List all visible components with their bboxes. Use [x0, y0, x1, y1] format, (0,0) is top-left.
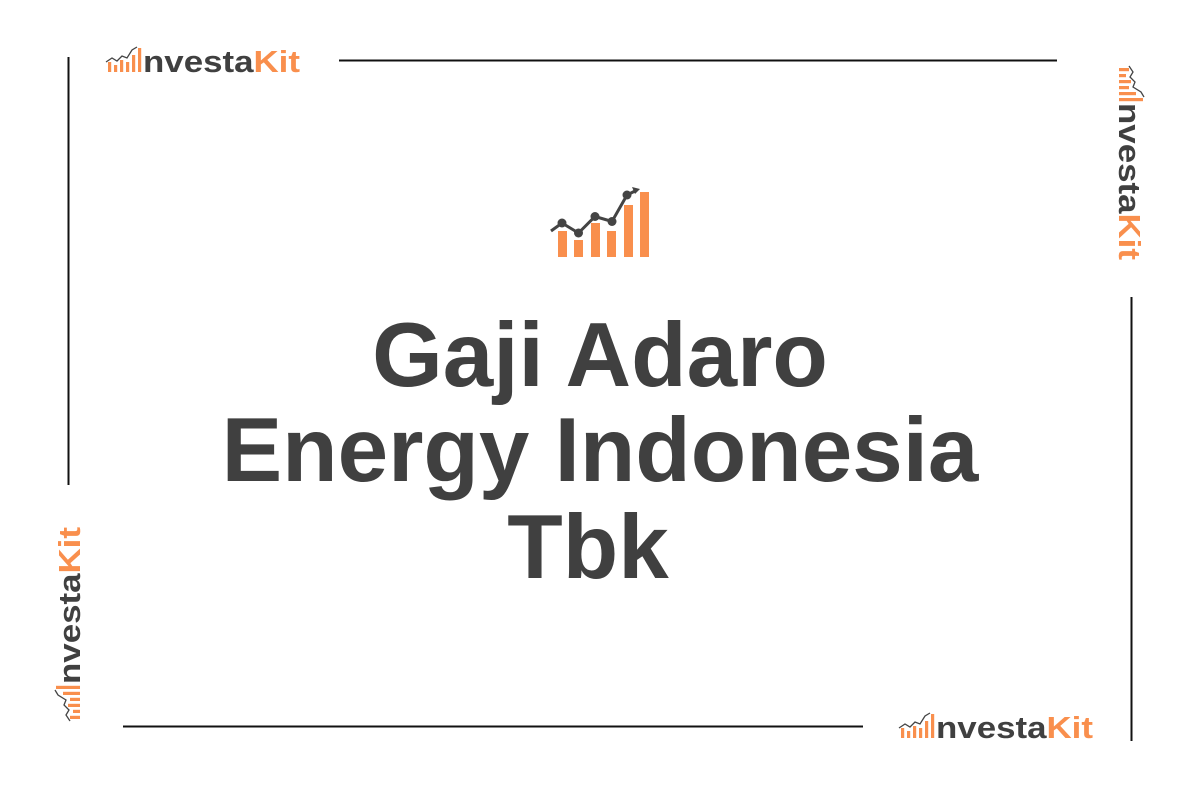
- logo: top right, rotated: [1112, 66, 1147, 260]
- orange bars: [558, 192, 649, 257]
- icon: central chart logo: [551, 187, 649, 257]
- wordmark: nvesta Kit: [936, 710, 1093, 745]
- icon: bars and trend line: [106, 47, 141, 72]
- title: Tbk: [507, 497, 669, 598]
- wordmark: nvestaKit: [52, 527, 87, 684]
- wordmark: nvesta Kit: [143, 44, 300, 79]
- title: Energy Indonesia: [222, 400, 980, 501]
- icon: bars and trend line: [1119, 66, 1144, 101]
- trend line with markers: [551, 187, 640, 238]
- icon: bars and trend line: [55, 686, 80, 721]
- wordmark: nvesta Kit: [1112, 103, 1147, 260]
- icon: bars and trend line: [899, 713, 934, 738]
- logo: bottom left, rotated: [52, 527, 87, 721]
- logo: bottom right: [899, 710, 1093, 745]
- title: Gaji Adaro: [372, 305, 828, 406]
- logo: top left: [106, 44, 300, 79]
- title: [222, 305, 980, 598]
